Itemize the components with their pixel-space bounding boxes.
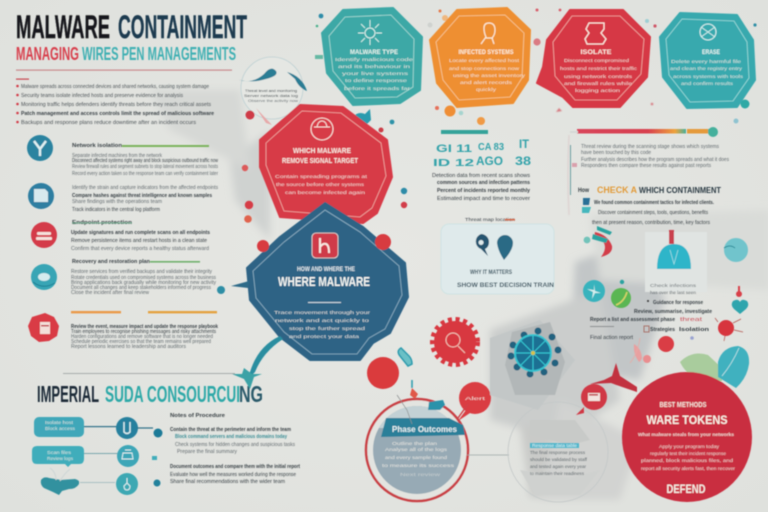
right section heading: How (578, 188, 589, 194)
icon: machine (585, 23, 606, 44)
text block 5: Harden configurations and remove software that is no longer needed (71, 334, 213, 340)
panel: large red card: REMOVE SIGNAL TARGET (282, 158, 359, 165)
stats block: Estimated impact and time to recover (437, 196, 530, 202)
panel: large red card: WHICH MALWARE (293, 148, 351, 155)
panel: teal card: to define response (345, 78, 408, 83)
panel: red card (537, 10, 650, 107)
intro bullets: Malware spreads across connected devices and shared networks, causing system damage (21, 84, 209, 90)
panel: circular recovery badge: and every sample found (385, 455, 448, 460)
panel: teal card: before it spreads far (344, 86, 411, 91)
panel: orange card: and stop connections now (449, 66, 520, 71)
process row 1 (34, 417, 162, 439)
icon: teal swirl (31, 264, 57, 290)
panel: central navy card: and protect your data (289, 334, 360, 339)
subtitle: WIRES PEN MANAGEMENTS (82, 44, 236, 64)
text block 5: Train employees to recognise phishing messages and risky attachments (71, 329, 216, 335)
stats block: AGO (476, 154, 503, 168)
panel: orange card: Locate every affected host (449, 58, 520, 63)
panel: red circle callout: DEFEND (666, 482, 706, 496)
process row 1: Block access (45, 426, 76, 431)
small globe callout (239, 57, 307, 119)
text: bullets right middle (590, 283, 712, 341)
process notes: Prepare the final summary (177, 449, 238, 455)
right section heading: CHECK A (597, 185, 637, 195)
text: bullets right middle: Strategies (650, 327, 675, 333)
stats block: ID 12 (433, 158, 475, 169)
panel: central navy card: Trace movement through your (274, 310, 371, 315)
panel: large red card: the source before other systems (276, 182, 365, 187)
text block 2: Track indicators in the central log platform (72, 207, 160, 213)
right intro text: We found common containment tactics for infected clients. (594, 200, 715, 206)
small globe callout: Observe the activity now (248, 98, 298, 103)
icon: drop pin (497, 235, 513, 260)
text block 1: Review firewall rules and segment subnets to stop lateral movement across hosts (72, 164, 218, 170)
text block 4: Close the incident after final review (71, 290, 149, 296)
stats block: GI 11 (436, 143, 472, 155)
panel: large red card: can become infected again (285, 190, 366, 195)
stats block: CA 83 (478, 142, 504, 153)
arrow: navy spike left (231, 281, 249, 288)
intro bullets (16, 84, 214, 126)
text block 2 (72, 185, 218, 213)
icon: person outline (481, 23, 495, 44)
text block 1 (72, 143, 218, 177)
panel: orange card: INFECTED SYSTEMS (458, 49, 514, 56)
title: CONTAINMENT (118, 9, 247, 45)
icon: blue document (28, 183, 54, 209)
panel: teal card right (660, 13, 755, 108)
process row 2 (32, 445, 157, 467)
panel: red circle callout: planned, block malicious files, and (641, 458, 734, 463)
section heading: SUDA CONSOURCUI (105, 381, 240, 407)
panel: gray circle outline: Response data table (532, 443, 578, 448)
arrow: navy curve to heading (245, 336, 283, 378)
icon: helmet (311, 118, 333, 140)
panel: red circle callout: Apply your program today (659, 444, 720, 449)
text: bullets right middle: Isolation (679, 327, 709, 333)
text: bullets right middle: Report a list and assessment phase (590, 317, 675, 323)
splashes near top (242, 8, 757, 223)
icon: teal disc right (724, 238, 748, 262)
intro bullets: Patch management and access controls limit the spread of malicious software (21, 111, 214, 117)
panel: large red card (260, 105, 392, 223)
small globe callout: Server network data log (244, 93, 298, 98)
panel: red card: Disconnect compromised (564, 58, 630, 63)
text block 5 (71, 311, 218, 350)
panel: red circle callout: regularly test their incident response (650, 451, 727, 456)
right info text: Threat review during the scanning stage shows which systems (581, 144, 719, 150)
text: bullets right middle: Review, summarise, investigate (634, 309, 712, 315)
right info bar (570, 127, 718, 137)
section heading: IMPERIAL (37, 381, 99, 407)
stats block: common sources and infection patterns (437, 180, 530, 186)
panel: circular recovery badge (366, 388, 509, 501)
right section heading: WHICH CONTAINMENT (639, 186, 721, 195)
soft edges on cards (556, 103, 653, 215)
panel: orange card: using the asset inventory (453, 73, 526, 78)
panel: gray circle outline: The final response process (530, 450, 586, 455)
text block 1: Network isolation (72, 143, 122, 149)
icon: red logo tile (312, 233, 338, 258)
right intro text (582, 198, 715, 226)
right intro text: Discover containment steps, tools, questions, benefits (598, 210, 708, 216)
panel: location card: SHOW BEST DECISION TRAIN (457, 283, 554, 289)
title: MALWARE (16, 9, 110, 45)
panel: central navy card: stop the further spread (289, 326, 366, 331)
icon: teal arc (584, 226, 612, 257)
text block 4: Bring applications back gradually while monitoring for new activity (71, 280, 216, 286)
text block 2: Identify the strain and capture indicators from the affected endpoints (72, 185, 218, 191)
icon: compass disc (583, 280, 605, 302)
text block 1: Disconnect affected systems right away and block suspicious outbound traffic now (72, 158, 218, 164)
panel: location card: WHY IT MATTERS (470, 270, 512, 276)
panel: teal card right: ERASE (702, 49, 721, 56)
panel: teal card: your live systems (342, 71, 410, 76)
panel: teal card: and its behaviour in (338, 64, 411, 69)
panel: teal card: Identify malicious code (335, 57, 414, 62)
process notes: Notes of Procedure (170, 413, 225, 419)
intro bullets: Security teams isolate infected hosts and preserve evidence for analysis (21, 93, 183, 99)
text block 3: Confirm that every device reports a healthy status afterward (71, 246, 209, 252)
stats block: 38 (515, 154, 531, 168)
process notes (170, 413, 300, 485)
text: bullets right middle: threat (680, 317, 703, 323)
stats block: IT (519, 137, 530, 151)
process row 2: Scan files (47, 450, 72, 455)
panel: orange card: and alert records (460, 80, 513, 85)
text block 2: Share findings with the operations team (72, 199, 162, 205)
panel: teal card right: across systems with tools (673, 74, 744, 79)
panel: large red card: Contain spreading programs at (275, 174, 368, 179)
panel: red card: ISOLATE (580, 49, 612, 56)
text block 4 (71, 259, 216, 296)
red splat with link (367, 348, 412, 389)
right info text: Responders then compare these results against past reports (581, 163, 711, 169)
text block 5: Review the event, measure impact and update the response playbook (71, 324, 218, 330)
icon: virus burst (358, 20, 382, 45)
icon: red drive (31, 222, 57, 248)
text block 3: Endpoint protection (72, 220, 132, 226)
intro bullets: Backups and response plans reduce downtime after an incident occurs (21, 120, 197, 126)
panel: central navy card: network and act quickly to (275, 318, 370, 323)
panel: red circle callout: report all security alerts fast, then recover (641, 466, 736, 471)
right info text: Further analysis describes how the program spreads and what it does (581, 157, 729, 163)
panel: circular recovery badge: to measure its success (382, 463, 455, 468)
panel: teal card right: Delete every harmful file (671, 59, 742, 64)
panel: red card: logging action (575, 88, 621, 93)
icon: red octagon document (28, 313, 59, 342)
section heading (37, 381, 263, 407)
panel: gray circle outline (508, 402, 608, 502)
small red circle label (458, 382, 491, 421)
process notes: Document outcomes and compare them with the initial report (170, 464, 300, 470)
subtitle (16, 44, 236, 64)
icon: globe virus (700, 24, 716, 40)
panel: location card: Threat map location (465, 217, 516, 222)
text: bullets right middle: Check infections (650, 283, 697, 288)
panel: gray circle outline: and tested again every year (530, 464, 587, 469)
small red circle label: Alert (465, 396, 487, 401)
right section heading (578, 185, 721, 195)
intro bullets: Monitoring traffic helps defenders identify threats before they reach critical assets (21, 102, 212, 108)
panel: gray circle outline: should be validated by staff (530, 457, 588, 462)
subtitle: MANAGING (16, 44, 79, 64)
icon: red doc badge (576, 384, 607, 415)
text block 3 (71, 220, 210, 252)
icon: teal branch (27, 135, 53, 161)
panel: bust card (645, 230, 707, 292)
panel: red circle callout: WARE TOKENS (646, 413, 728, 427)
panel: orange card (430, 8, 530, 107)
text: bullets right middle: has over the last seen (650, 290, 697, 295)
icon: red gear (432, 320, 478, 364)
right intro text: then at present reason, contribution, time, key factors (592, 220, 710, 226)
panel: central navy card (247, 203, 408, 360)
text block 4: Recovery and restoration plan (72, 259, 150, 265)
panel: circular recovery badge: Phase Outcomes (392, 424, 457, 434)
right info text: have been touched by this code (581, 150, 651, 156)
panel: red card: hosts and restrict their traffic (560, 66, 638, 71)
text block 4: Document all changes and keep stakeholders informed of progress (71, 285, 211, 291)
panel: red card: using network controls (564, 74, 633, 79)
text block 2: Compare hashes against threat intelligence and known samples (72, 193, 212, 199)
panel: gray circle outline: to maintain their readiness (530, 471, 585, 476)
icon: leaves (680, 346, 749, 388)
icon: gear hexagon (490, 320, 575, 410)
small globe callout: Threat level and monitoring (245, 88, 297, 93)
dot connector (217, 286, 225, 294)
panel: central navy card: WHERE MALWARE (278, 274, 370, 289)
panel: red circle callout (590, 363, 752, 502)
section heading: NG (239, 381, 263, 407)
red splats beside navy (257, 234, 391, 252)
panel: red circle callout: BEST METHODS (660, 402, 707, 409)
icon: heart and drip (732, 286, 748, 314)
panel: teal card right: and confirm results (681, 81, 734, 86)
icon: pink petals (630, 338, 651, 363)
icon: pin (476, 234, 489, 256)
text block 1: Separate infected machines from the network (72, 153, 162, 159)
panel: location card (441, 217, 554, 294)
process notes: Share final recommendations with the wider team (170, 479, 285, 485)
right info text (570, 144, 729, 195)
stats block: Percent of incidents reported monthly (437, 188, 530, 194)
panel: circular recovery badge: Analyse all of the logs (385, 447, 448, 452)
text block 4: Rotate credentials used on compromised systems across the business (71, 275, 216, 281)
icon: red dot (658, 336, 674, 352)
panel: circular recovery badge: Next review (400, 472, 441, 477)
panel: teal card right: and clean the registry entry (670, 66, 743, 71)
process notes: Block command servers and malicious domains today (175, 434, 287, 440)
process row 3 (41, 468, 160, 495)
text block 5: Report lessons learned to leadership and auditors (71, 344, 187, 350)
text block 3: Remove persistence items and restart hosts in a clean state (71, 238, 207, 244)
text: bullets right middle: Guidance for response (653, 300, 703, 306)
icon: purple dot (690, 336, 694, 340)
panel: teal card (315, 8, 422, 105)
text block 3: Update signatures and run complete scans on all endpoints (71, 230, 210, 236)
panel: circular recovery badge: Outline the plan (392, 441, 438, 446)
text block 5: Schedule periodic exercises so that the team remains well prepared (71, 339, 211, 345)
panel: red circle callout: What malware steals from your networks (638, 432, 735, 437)
panel: central navy card: HOW AND WHERE THE (297, 266, 356, 273)
process notes: Contain the threat at the perimeter and inform the team (170, 427, 292, 433)
text block 1: Record every action taken so the response team can verify containment later (72, 171, 218, 177)
panel: orange card: quickly (476, 87, 497, 92)
icon: green ball (611, 280, 631, 308)
text: bullets right middle: Final action report (590, 335, 634, 341)
process notes: Check systems for hidden changes and suspicious tasks (175, 442, 295, 448)
stats block (432, 130, 531, 202)
icon: red virus right (715, 318, 743, 341)
panel: teal card: MALWARE TYPE (350, 49, 399, 56)
process row 1: Isolate host (45, 420, 74, 425)
process row 2: Review logs (47, 456, 74, 461)
text block 4: Restore services from verified backups and validate their integrity (71, 269, 212, 275)
panel: red card: and firewall rules while (564, 81, 633, 86)
stats block: Detection data from recent scans shows (432, 173, 531, 179)
process notes: Evaluate how well the measures worked during the response (170, 472, 296, 478)
